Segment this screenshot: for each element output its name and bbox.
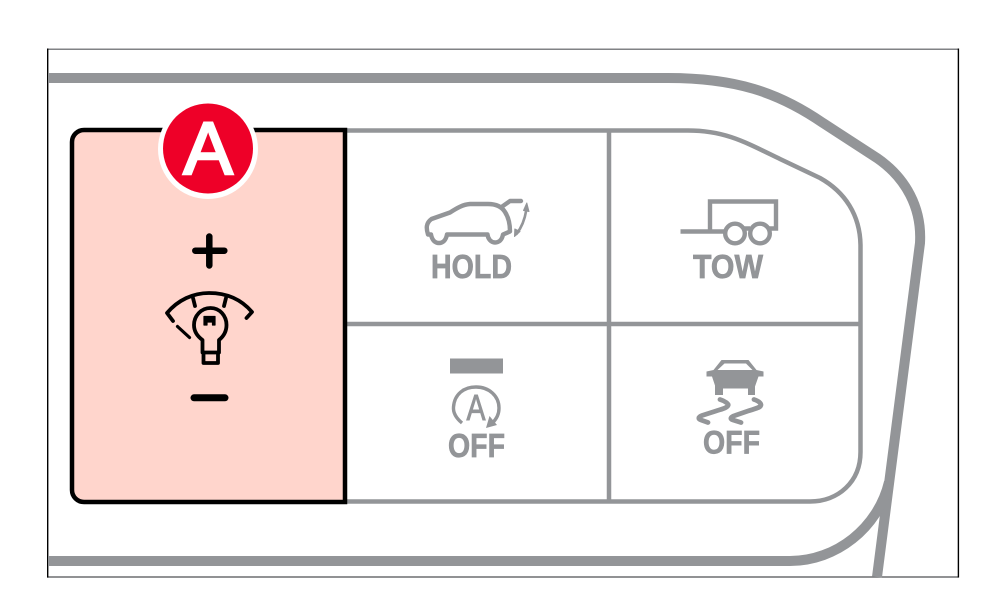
panel A: highlighted brightness switch [72, 99, 345, 502]
label: OFF: OFF [448, 427, 505, 464]
frame [47, 48, 958, 578]
outer console outline [48, 78, 920, 577]
switch: tow mode [680, 202, 776, 285]
badge A: A [183, 107, 233, 190]
plus symbol [195, 236, 224, 266]
label: TOW: TOW [693, 248, 764, 285]
label: HOLD: HOLD [431, 248, 512, 285]
icon: auto hold arrow: A [466, 387, 486, 428]
icon: car with open tailgate [427, 201, 529, 243]
switch: traction control off [699, 360, 764, 460]
badge A [158, 99, 258, 199]
switch grid outline [345, 130, 860, 502]
label: OFF: OFF [703, 424, 760, 460]
icon: trailer [680, 202, 776, 243]
switch: tailgate hold [427, 201, 529, 285]
icon: instrument brightness bulb [167, 293, 252, 363]
icon: skidding car [699, 360, 764, 422]
indicator bar [450, 358, 503, 374]
minus symbol [194, 394, 225, 401]
switch: auto stop off [448, 358, 505, 464]
